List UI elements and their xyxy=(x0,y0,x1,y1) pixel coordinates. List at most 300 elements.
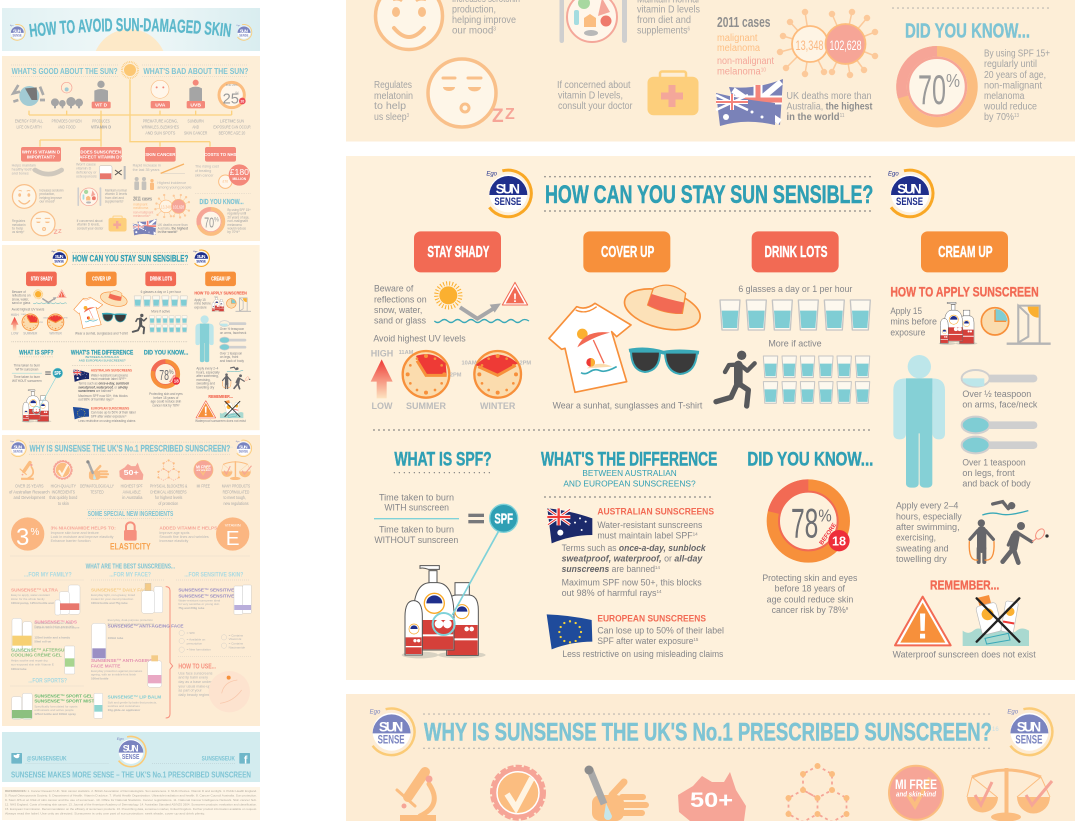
captions: reasons: OVER 25 YEARS xyxy=(15,483,44,488)
text: how to use: and lip balm every xyxy=(178,676,208,680)
buttons: topics: IMPORTANT? xyxy=(27,155,55,160)
icon: swimmer xyxy=(982,502,1028,515)
text: apply 15 mins: exposure xyxy=(890,327,925,337)
button: stay shady: STAY SHADY xyxy=(427,244,489,261)
captions: good and bad: EXPOSURE CAN OCCUR xyxy=(213,125,251,130)
product: sensitive: SUNSENSE™ SENSITIVE MATTE xyxy=(178,593,251,598)
legend: product symbols xyxy=(179,630,245,652)
icon: vit d person xyxy=(92,81,111,108)
icon: uv arrow scale xyxy=(371,349,393,411)
thumbnail: references: Always read the label. Use only as directed. Sunscreen is only one part of sun protection: seek shade, cover up and drink plenty. xyxy=(5,812,205,816)
text: maintain normal vitamin d: vitamin D levels xyxy=(637,4,700,16)
captions: reasons: DERMATOLOGICALLY xyxy=(80,483,114,488)
icon: uva face xyxy=(151,80,170,108)
text: australian sunscreens: Maximum SPF now 50+, this blocks xyxy=(562,578,702,588)
text: half teaspoon: Over ½ teaspoon xyxy=(962,389,1031,399)
text: how to use: Use face sunscreens xyxy=(178,671,213,675)
icon: uvb person xyxy=(187,80,205,108)
text: over one teaspoon xyxy=(962,457,1031,489)
product: lip balm: SUNSENSE™ LIP BALM xyxy=(108,695,161,700)
captions: reasons: CHEMICAL ABSORBERS xyxy=(150,489,187,494)
text: vitamin d details: Won't cause xyxy=(76,163,96,167)
text: vitamin d details: vitamin D xyxy=(76,167,92,171)
text: european sunscreens: EUROPEAN SUNSCREENS xyxy=(597,613,706,623)
product: anti-ageing face matte: Everyday protection against premature xyxy=(91,669,143,673)
captions: reasons: and Development xyxy=(13,495,46,500)
captions: reasons: MANY PRODUCTS xyxy=(222,483,250,488)
captions: reasons: PHYSICAL BLOCKERS & xyxy=(150,483,187,488)
icon: summer clock: SUMMER xyxy=(406,401,446,411)
product: anti-ageing face matte: 100ml bottle xyxy=(91,677,109,681)
button: drink lots xyxy=(752,231,839,272)
product: lip balm: Soft and gentle lip balm that protects, xyxy=(108,700,157,704)
panel: why is sunsense no.1 (upper part, large view) xyxy=(346,694,1075,821)
icon: summer clock xyxy=(399,350,462,411)
product: anti-ageing face: SUNSENSE™ ANTI-AGEING FACE xyxy=(108,624,184,629)
icon: sleeping face xyxy=(428,59,515,127)
text: regulates melatonin xyxy=(374,80,413,123)
icon: winter clock xyxy=(461,351,531,411)
title: HOW CAN YOU STAY SUN SENSIBLE? xyxy=(545,181,873,209)
icon: face application xyxy=(209,671,250,712)
icon: bone xyxy=(35,170,62,174)
captions: reasons: HIGH-QUALITY xyxy=(51,483,76,488)
text: regulates melatonin: us sleep xyxy=(374,112,411,123)
icon: crossed bottle xyxy=(99,166,126,180)
logo: left: SUN xyxy=(379,720,403,735)
icon: six large glasses xyxy=(720,300,870,330)
icon: australia 50+: 50+ xyxy=(690,789,733,812)
text: niacinamide: Lock in moisture and improve elasticity xyxy=(51,535,114,539)
text: twitter handle: @SUNSENSEUK xyxy=(27,756,67,763)
text: over one teaspoon: and back of body xyxy=(962,479,1031,489)
group: lower-right column xyxy=(747,450,1049,659)
thumbnail content: lower good and bad xyxy=(2,185,260,241)
button: cover up xyxy=(583,231,670,272)
product: sport: SUNSENSE™ SPORT MIST xyxy=(34,699,95,704)
text: how to use: your usual make-up xyxy=(178,684,210,688)
logo: left: Ego xyxy=(486,171,498,177)
text: european sunscreens: Less restrictive on using misleading claims xyxy=(562,649,724,659)
legend: product symbols: = Contains xyxy=(229,633,244,637)
text: european sunscreens xyxy=(562,613,724,659)
captions: reasons: REFORMULATED xyxy=(223,489,249,494)
text: 2011 cases: melanoma xyxy=(717,66,764,78)
text: uk deaths xyxy=(786,91,873,123)
text: kids and anti-ageing details: from the sun and premature ageing xyxy=(108,622,155,626)
text: australian sunscreens: 14 xyxy=(655,565,660,570)
captions: good and bad: WRINKLES, BLEMISHES xyxy=(142,125,179,130)
icon: warning triangle large xyxy=(895,597,951,647)
icon: european flag xyxy=(547,614,592,649)
product: lip balm: soothes and moisturises xyxy=(108,704,140,708)
text: six glasses: 6 glasses a day or 1 per hour xyxy=(738,284,852,294)
text: beware of reflections: reflections on xyxy=(374,294,427,304)
text: australian sunscreens: AUSTRALIAN SUNSCREENS xyxy=(597,506,714,516)
text: by using spf 15: melanoma xyxy=(984,91,1025,102)
text: regulates melatonin: Regulates xyxy=(374,80,412,91)
chart: 78 percent donut: 78 xyxy=(791,499,818,546)
heading: good and bad: WHAT'S GOOD ABOUT THE SUN? xyxy=(12,66,118,76)
captions: good and bad: SUNBURN xyxy=(187,119,204,124)
text: australian sunscreens: sweatproof, waterproof, or all-day xyxy=(562,554,703,564)
captions: good and bad: SKIN CANCER xyxy=(184,131,207,136)
badge: spf xyxy=(490,504,518,532)
buttons: topics: COSTS TO NHS xyxy=(204,152,237,157)
text: facebook name: SUNSENSEUK xyxy=(202,756,235,763)
chart: incidence line xyxy=(161,164,185,173)
chart: nhs costs: £180 xyxy=(230,167,249,177)
icon: uv arrow scale: LOW xyxy=(372,401,393,411)
product: sensitive: 75g and 200g tube xyxy=(178,606,205,610)
text: australian sunscreens: Water-resistant sunscreens xyxy=(597,520,703,530)
subheadings: audiences: ...FOR MY FACE? xyxy=(109,572,151,579)
text: beware of reflections xyxy=(374,284,427,326)
text: vitamin d details: Helps maintain xyxy=(12,164,36,168)
badge: vitamin e: E xyxy=(226,527,240,550)
icon: dropper and hand xyxy=(584,766,646,821)
text: 2011 cases: 2011 cases xyxy=(717,14,770,31)
logo: left xyxy=(486,170,531,217)
icon: half teaspoon xyxy=(962,370,1037,387)
icon: first aid kit xyxy=(648,72,698,115)
button: cover up: COVER UP xyxy=(601,244,654,261)
thumbnail: references: 15. European Commission. Recommendation on the efficacy of sunscreen products. 16. Prescribing data, sunscreen market, United Kingdom. Further product information available on request. xyxy=(5,807,257,811)
text: apply 15 mins: mins before xyxy=(890,317,937,327)
chart: cell counts: 13,348 xyxy=(796,37,824,53)
product: anti-ageing face matte: ageing, with an invisible-hint finish xyxy=(91,673,136,677)
thumbnail: page header xyxy=(2,8,260,51)
text: spf formula xyxy=(374,492,484,545)
product: daily face: 100ml bottle and 75g tube xyxy=(91,601,128,605)
text: spf formula: WITH sunscreen xyxy=(384,503,449,513)
icon: facebook xyxy=(239,753,250,766)
icon: vit d person: VIT D xyxy=(95,103,108,108)
product: aftersun: sun-exposed skin with Vitamin E xyxy=(11,663,54,667)
icon: sleeping face: Z xyxy=(492,106,504,127)
heading: what's the difference: WHAT'S THE DIFFERENCE xyxy=(541,450,717,471)
buttons: topics: DOES SUNSCREEN xyxy=(80,149,121,154)
icon: mi free badge: MI FREE xyxy=(895,776,937,792)
text: maintain normal vitamin d: from diet and xyxy=(637,15,691,26)
text: vitamin d details: the last 35 years xyxy=(133,168,160,172)
captions: reasons: INGREDIENTS xyxy=(52,489,75,494)
product: anti-ageing face matte: SUNSENSE™ ANTI-AGEING xyxy=(91,658,154,663)
product: ultra: SUNSENSE™ ULTRA xyxy=(11,588,59,593)
chart: nhs costs: MILLION xyxy=(232,177,247,181)
text: how to use xyxy=(178,671,213,697)
chart: 78 percent donut: BEFORE xyxy=(819,522,838,546)
legend: product symbols: prescription xyxy=(187,641,202,645)
icon: lock with elasticity xyxy=(110,522,151,552)
text: 2011 cases: melanoma xyxy=(717,43,760,54)
thumbnail: references xyxy=(2,787,260,820)
product: sensitive: for very sensitive or young skin xyxy=(178,602,220,606)
legend: product symbols: = SPF xyxy=(187,631,195,635)
text: beware of reflections: Beware of xyxy=(374,284,414,294)
product: sport xyxy=(12,693,98,719)
text: vitamin d details: The rising cost xyxy=(195,165,219,169)
text: uk deaths: 11 xyxy=(840,113,845,119)
legend: product symbols: Niacinamide xyxy=(229,645,245,649)
product: sensitive xyxy=(178,585,251,614)
icon: sunglasses xyxy=(629,349,699,374)
text: increases serotonin: our mood xyxy=(452,26,494,36)
icon: twelve small glasses xyxy=(763,356,870,403)
product: ultra: lotion for the whole family xyxy=(11,597,45,601)
text: over one teaspoon: Over 1 teaspoon xyxy=(962,457,1026,467)
text: 2011 cases xyxy=(717,14,774,78)
text: vitamin d details: deficiency or xyxy=(76,171,97,175)
captions: good and bad xyxy=(15,119,251,136)
captions: good and bad: PREMATURE AGEING, xyxy=(143,119,178,124)
subheadings: audiences: ...FOR SENSITIVE SKIN? xyxy=(184,572,243,579)
captions: good and bad: ENERGY FOR ALL xyxy=(15,119,44,124)
icon: uk and australian flags xyxy=(716,79,783,126)
text: by using spf 15: non-malignant xyxy=(984,80,1042,92)
text: protecting skin: age could reduce skin xyxy=(767,594,853,604)
text: vitamin d details: skin cancer xyxy=(195,173,214,177)
text: australian sunscreens: out 98% of harmful rays xyxy=(562,588,657,598)
text: kids and anti-ageing details xyxy=(34,618,155,644)
icon: crossed out waterproof sunscreen xyxy=(963,594,1029,646)
text: vitamin d details: Rapid increase in xyxy=(133,164,161,168)
text: by using spf 15: By using SPF 15+ xyxy=(984,49,1050,60)
heading: new ingredients: SOME SPECIAL NEW INGREDIENTS xyxy=(88,509,173,518)
text: increases serotonin: 3 xyxy=(493,26,496,32)
text: avoid highest uv levels: Avoid highest UV levels xyxy=(373,333,466,343)
logo: left: SUN xyxy=(496,181,520,196)
subheading: for sports: ...FOR SPORTS? xyxy=(28,678,67,685)
thumbnail: references: 12. NHS England. Costs of treating skin cancer. 13. Journal of the American Academy of Dermatology. 14. Australian Standard AS/NZS 2604. Sunscreen products: evaluation and classification. xyxy=(5,802,257,806)
icon: winter clock: 2PM xyxy=(520,360,531,366)
icon: plate with food xyxy=(560,0,627,43)
icon: sun xyxy=(122,62,138,78)
text: vitamin e xyxy=(159,525,227,543)
text: increases serotonin: helping improve xyxy=(452,15,516,26)
captions: reasons: TESTED xyxy=(90,489,104,494)
text: kids and anti-ageing details: children from 6 months and above xyxy=(34,625,80,629)
text: protecting skin: before 18 years of xyxy=(775,584,845,594)
icon: facebook: f xyxy=(244,754,248,766)
text: protecting skin: 9 xyxy=(846,606,849,611)
text: by using spf 15: by 70% xyxy=(984,112,1017,123)
text: increases serotonin: production, xyxy=(452,4,496,16)
text: apply every 2-4 hours: sweating and xyxy=(896,543,949,553)
logo: left xyxy=(370,708,415,755)
badge: vitamin e: VITAMIN xyxy=(225,523,241,528)
icon: body figure xyxy=(893,355,945,488)
icon: one teaspoon xyxy=(962,417,1037,453)
badge: 3 percent: % xyxy=(31,527,40,538)
button: cream up: CREAM UP xyxy=(938,244,992,261)
logo: left: SENSE xyxy=(378,734,405,746)
text: vitamin d details xyxy=(12,163,219,189)
captions: good and bad: PRODUCES xyxy=(92,119,110,124)
chart: 70 percent donut: % xyxy=(946,71,960,91)
thumbnail: what's good and bad about the sun xyxy=(2,56,260,241)
captions: good and bad: VITAMIN D xyxy=(91,125,111,130)
text: if concerned xyxy=(557,80,633,112)
chart: 25 percent donut xyxy=(219,82,246,108)
text: how to use: day as a base under xyxy=(178,680,212,684)
text: kids and anti-ageing details: 100ml tube xyxy=(108,636,124,640)
text: if concerned: consult your doctor xyxy=(558,101,633,112)
text: kids and anti-ageing details: 50ml roll-on xyxy=(34,640,51,644)
icon: microscope xyxy=(397,772,436,821)
product: sport: enthusiasts and active people xyxy=(34,708,74,712)
subheading: between sunscreens: BETWEEN AUSTRALIAN xyxy=(582,469,677,478)
chart: 25 percent donut: 20 xyxy=(240,99,244,103)
text: european sunscreens: Can lose up to 50% of their label xyxy=(597,625,724,635)
captions: reasons: to skin xyxy=(58,501,69,506)
text: how to use: as part of your xyxy=(178,689,202,693)
buttons: topics: WHY IS VITAMIN D xyxy=(22,149,60,154)
legend: product symbols: Vitamin E xyxy=(229,637,241,641)
icon: summer clock: 2PM xyxy=(450,373,462,379)
text: apply every 2-4 hours: after swimming, xyxy=(896,522,960,532)
captions: reasons: of protection xyxy=(158,501,179,506)
text: vitamin e: Improve age spots xyxy=(159,531,190,535)
heading: good and bad: WHAT'S BAD ABOUT THE SUN? xyxy=(143,66,248,76)
captions: reasons: AVAILABLE xyxy=(123,489,141,494)
thumbnail: references: REFERENCES: 1. Cancer Research UK. Skin cancer statistics. 2. British Association of Dermatologists. Sun awareness. 3. NHS Choices. Vitamin D and sunlight. 4. Public Health England. xyxy=(5,789,257,793)
icon: door with sun xyxy=(1007,306,1051,344)
heading: best sunscreens: WHAT ARE THE BEST SUNSCREENS... xyxy=(86,562,175,571)
text: spf formula: Time taken to burn xyxy=(379,492,454,502)
chart: cell counts xyxy=(778,10,878,78)
icon: summer clock: 11AM xyxy=(399,350,414,356)
heading: did you know: DID YOU KNOW... xyxy=(747,450,873,471)
text: uk deaths: Australia, the highest xyxy=(786,102,873,112)
captions: reasons xyxy=(9,483,250,506)
icon: oxygen and trees xyxy=(51,82,83,108)
logo: left: Ego xyxy=(370,710,381,716)
text: over one teaspoon: on legs, front xyxy=(962,468,1015,478)
text: regulates melatonin: melatonin xyxy=(374,91,413,102)
product: anti-ageing face xyxy=(92,623,184,660)
icon: sun xyxy=(436,283,460,307)
text: more if active: More if active xyxy=(768,338,822,348)
text: european sunscreens: SPF after water exposure xyxy=(597,636,699,646)
icon: twitter xyxy=(11,753,22,764)
icon: warning triangle: ! xyxy=(513,291,517,305)
text: beware of reflections: snow, water, xyxy=(374,305,422,315)
icon: winter clock: WINTER xyxy=(480,401,516,411)
chart: 25 percent donut: 25 xyxy=(223,91,239,107)
chart: 70 percent donut: 70 xyxy=(918,66,946,113)
button: cream up xyxy=(921,231,1008,272)
text: australian sunscreens: 14 xyxy=(693,531,698,536)
text: 2011 cases: malignant xyxy=(717,33,758,44)
text: uk deaths: UK deaths more than xyxy=(786,91,872,102)
product: kids: Easy to apply lotion especially xyxy=(34,625,75,629)
text: uk deaths: in the world xyxy=(786,112,840,123)
text: by using spf 15: 20 years of age, xyxy=(984,70,1046,81)
icon: t-shirt xyxy=(549,303,631,392)
text: half teaspoon xyxy=(962,389,1038,410)
text: by using spf 15: 13 xyxy=(1014,113,1019,119)
product: daily face: SUNSENSE™ DAILY FACE xyxy=(91,588,150,593)
flow arrows xyxy=(29,79,232,147)
icon: sunscreen bottles small xyxy=(939,302,977,345)
text: australian sunscreens: sunscreens are banned xyxy=(562,564,657,574)
thumbnail: why is sunsense no.1 xyxy=(2,435,260,726)
text: spf formula: WITHOUT sunscreen xyxy=(374,535,458,545)
text: spf formula: Time taken to burn xyxy=(379,525,454,535)
text: wear a sunhat: Wear a sunhat, sunglasses and T-shirt xyxy=(553,401,703,411)
legend: product symbols: = Available on xyxy=(187,638,206,642)
panel: what's good and bad (lower part, large view) xyxy=(346,0,1075,142)
text: niacinamide: Enhance barrier function xyxy=(51,539,91,543)
chart: nhs costs: £70 xyxy=(223,180,228,184)
text: maintain normal vitamin d: 6 xyxy=(688,26,690,32)
subheading: between sunscreens xyxy=(563,469,696,488)
heading: good and bad xyxy=(12,66,248,76)
icon: sunhat xyxy=(620,282,704,337)
legend: product symbols: = Contains xyxy=(229,642,244,646)
text: apply every 2-4 hours: exercising, xyxy=(896,533,936,543)
chart: 78 percent donut: 18 xyxy=(832,534,846,548)
text: apply every 2-4 hours: towelling dry xyxy=(896,554,947,564)
text: maintain normal vitamin d xyxy=(637,0,700,36)
product: ultra xyxy=(11,585,80,615)
text: kids and anti-ageing details: 125ml bottle and a handy xyxy=(34,636,70,640)
captions: reasons: to meet tough, xyxy=(223,495,246,500)
text: kids and anti-ageing details: Everyday, dual-purpose protection xyxy=(108,618,153,622)
text: apply 15 mins xyxy=(890,306,937,337)
icon: hexagon molecules xyxy=(786,763,850,821)
text: australian sunscreens: 14 xyxy=(656,589,662,594)
product: aftersun: COOLING CRÈME GEL xyxy=(11,651,62,658)
icon: winter clock: 10AM xyxy=(461,360,477,366)
legend: product symbols: = New formulation xyxy=(187,648,211,652)
text: vitamin d details: and bones xyxy=(12,172,29,176)
icon: water wave xyxy=(434,319,529,322)
captions: good and bad: AND xyxy=(192,125,199,130)
group: drink lots column xyxy=(716,284,1051,488)
text: australian sunscreens xyxy=(562,506,714,598)
product: lip balm xyxy=(94,693,161,718)
chart: 78 percent donut xyxy=(773,486,850,556)
product: sensitive: SUNSENSE™ SENSITIVE & xyxy=(178,588,240,593)
icon: reflection arrow xyxy=(460,303,501,319)
button: stay shady xyxy=(414,231,501,272)
text: apply every 2-4 hours: hours, especially xyxy=(896,511,962,521)
captions: reasons: for highest levels xyxy=(155,495,182,500)
icon: uva face: UVA xyxy=(155,102,166,108)
captions: good and bad: AND FOOD xyxy=(58,125,75,130)
chart: nhs costs xyxy=(219,164,250,188)
text: regulates melatonin: 3 xyxy=(407,113,409,119)
footer slogan: SUNSENSE MAKES MORE SENSE – THE UK'S No.1 PRESCRIBED SUNSCREEN xyxy=(11,769,251,779)
text: maintain normal vitamin d: supplements xyxy=(637,26,694,36)
product: sport: 125ml bottle and 100ml spray xyxy=(34,712,76,716)
product: aftersun xyxy=(11,646,75,674)
thumbnail: page header: HOW TO AVOID SUN-DAMAGED SKIN xyxy=(29,18,232,38)
captions: reasons: MI FREE xyxy=(197,483,210,488)
text: vitamin d details: Highest incidence xyxy=(157,181,186,185)
chart: 70 percent donut xyxy=(901,51,972,122)
text: vitamin d details: of treating xyxy=(195,169,211,173)
logo: left: SENSE xyxy=(494,196,522,208)
text: australian sunscreens: Terms such as once-a-day, sunblock xyxy=(562,543,707,553)
badge: 3 percent xyxy=(11,517,44,551)
subheadings: audiences xyxy=(24,572,243,579)
product: daily face: instant for year-round protection xyxy=(91,597,134,601)
thumbnail: references: 9. Stern RS et al. Risk of skin cancer and the use of sunscreen. 10. Office for National Statistics. Cancer registrations. 11. National Cancer Intelligence Network. Skin cancer hub. xyxy=(5,798,257,802)
text: vitamin d details: healthy teeth xyxy=(12,168,33,172)
